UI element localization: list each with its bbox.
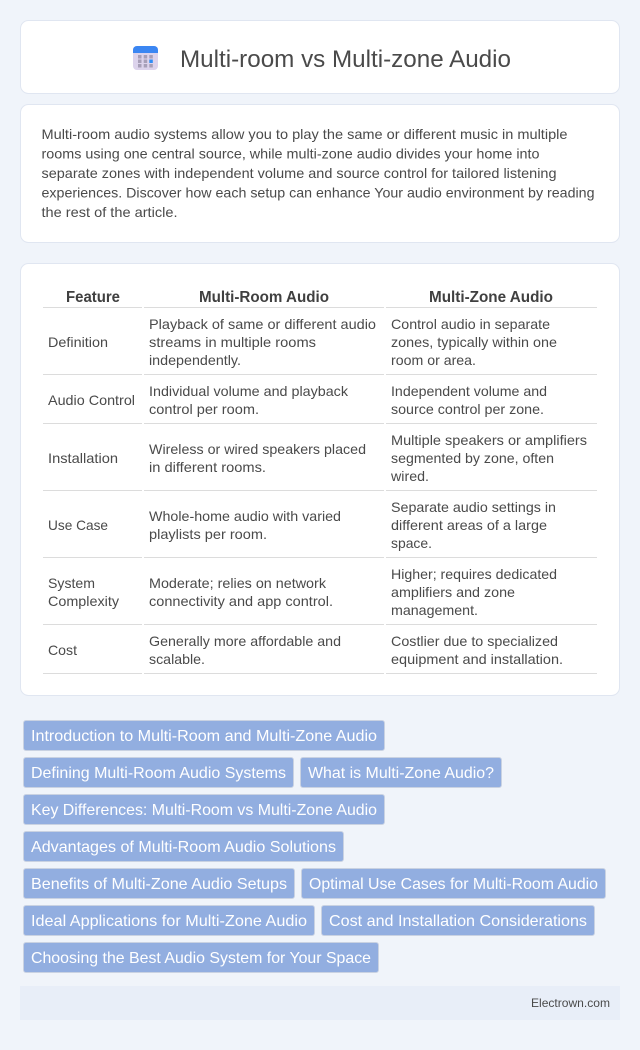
- footer: [20, 986, 620, 1020]
- table row: system complexity: [43, 566, 597, 624]
- icon: calendar grid: [133, 46, 158, 70]
- table row: system complexity: amplifiers and zone: [391, 584, 515, 600]
- chip: key differences: [24, 794, 384, 824]
- table header row: Multi-Room Audio: [199, 289, 329, 306]
- table row: definition: Definition: [48, 334, 108, 350]
- table row: definition: zones, typically within one: [391, 334, 557, 350]
- chip: introduction: Introduction to Multi-Room and Multi-Zone Audio: [31, 728, 377, 745]
- table row: definition: Control audio in separate: [391, 316, 550, 332]
- table row: use case: space.: [391, 535, 432, 551]
- table row: system complexity: Moderate; relies on network: [149, 575, 327, 591]
- panel: introduction: [20, 104, 620, 242]
- text block: introduction paragraph: Multi-room audio systems allow you to play the same or different music in multiple: [42, 126, 568, 142]
- chip: advantages: [24, 832, 344, 862]
- text block: introduction paragraph: [42, 126, 594, 220]
- panel: header card: [20, 20, 620, 94]
- chip: benefits: Benefits of Multi-Zone Audio Setups: [31, 876, 287, 893]
- table row: installation: wired.: [390, 468, 429, 484]
- table row: definition: [43, 316, 597, 374]
- chip: benefits: [24, 868, 294, 898]
- table row: installation: in different rooms.: [149, 459, 266, 475]
- table row: definition: Playback of same or different audio: [149, 316, 376, 332]
- table row: definition: independently.: [149, 352, 241, 368]
- table row: installation: [43, 432, 597, 490]
- table row: audio control: source control per zone.: [391, 401, 544, 417]
- chip: defining multi-room: Defining Multi-Room Audio Systems: [31, 765, 286, 782]
- table row: audio control: [43, 383, 597, 424]
- table row: use case: [43, 499, 597, 558]
- chip: advantages: Advantages of Multi-Room Audio Solutions: [31, 839, 336, 856]
- table row: definition: room or area.: [391, 352, 476, 368]
- chip: cost and installation: [322, 906, 594, 936]
- table row: cost: [43, 633, 597, 674]
- table header row: Multi-Zone Audio: [429, 289, 553, 306]
- chip: introduction: [24, 720, 384, 750]
- chip: ideal applications: Ideal Applications for Multi-Zone Audio: [31, 913, 307, 930]
- chip: optimal use cases: Optimal Use Cases for Multi-Room Audio: [309, 876, 598, 893]
- table row: use case: Separate audio settings in: [391, 499, 556, 515]
- table row: audio control: control per room.: [149, 401, 259, 417]
- table header row: Feature: [66, 289, 120, 306]
- text block: introduction paragraph: the rest of the article.: [42, 204, 178, 220]
- table row: cost: Cost: [48, 642, 77, 658]
- text block: introduction paragraph: separate zones with independent volume and source control for tailored listening: [42, 165, 556, 181]
- chip: defining multi-room: [24, 758, 294, 788]
- text block: introduction paragraph: experiences. Discover how each setup can enhance Your audio environment by reading: [42, 184, 594, 200]
- section links: table of contents chips: [24, 720, 606, 972]
- chip: choosing the best: [24, 942, 378, 972]
- table row: audio control: Audio Control: [48, 392, 135, 408]
- table row: definition: streams in multiple rooms: [149, 334, 316, 350]
- chip: cost and installation: Cost and Installation Considerations: [329, 913, 587, 930]
- chip: optimal use cases: [302, 868, 606, 898]
- chip: what is multi-zone: [300, 758, 502, 788]
- table row: cost: equipment and installation.: [391, 651, 563, 667]
- table row: cost: Generally more affordable and: [149, 633, 341, 649]
- chip: ideal applications: [24, 906, 314, 936]
- chip: choosing the best: Choosing the Best Audio System for Your Space: [31, 950, 371, 967]
- table row: audio control: Independent volume and: [391, 383, 547, 399]
- table row: use case: Use Case: [48, 517, 108, 533]
- table row: installation: Multiple speakers or amplifiers: [391, 432, 587, 448]
- table row: cost: Costlier due to specialized: [391, 633, 558, 649]
- table row: system complexity: connectivity and app control.: [149, 593, 333, 609]
- table row: installation: segmented by zone, often: [391, 450, 554, 466]
- panel: comparison table: [20, 264, 620, 696]
- chip: key differences: Key Differences: Multi-Room vs Multi-Zone Audio: [31, 802, 377, 819]
- table row: installation: Installation: [48, 450, 118, 466]
- chip: what is multi-zone: What is Multi-Zone Audio?: [308, 765, 494, 782]
- table row: use case: playlists per room.: [149, 526, 267, 542]
- table row: installation: Wireless or wired speakers placed: [149, 441, 366, 457]
- footer: Electrown.com: [531, 996, 610, 1010]
- title: Multi-room vs Multi-zone Audio: [180, 46, 511, 73]
- table row: audio control: Individual volume and playback: [149, 383, 349, 399]
- table row: system complexity: System: [48, 575, 95, 591]
- table row: use case: different areas of a large: [391, 517, 547, 533]
- table row: use case: Whole-home audio with varied: [149, 508, 341, 524]
- table row: system complexity: Higher; requires dedicated: [391, 566, 557, 582]
- table header row: [43, 289, 597, 308]
- text block: introduction paragraph: rooms using one central source, while multi-zone audio divides your home into: [42, 146, 540, 162]
- table row: system complexity: management.: [391, 602, 478, 618]
- table row: system complexity: Complexity: [48, 593, 119, 609]
- table row: cost: scalable.: [149, 651, 205, 667]
